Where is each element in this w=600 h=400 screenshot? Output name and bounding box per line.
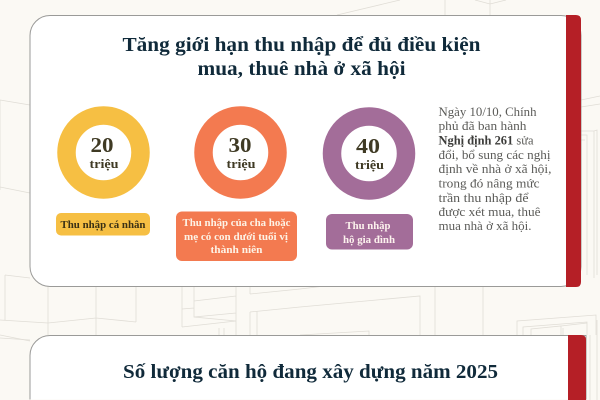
- label: household income: Thu nhập: [346, 220, 390, 232]
- donut: 30 million: triệu: [226, 156, 256, 171]
- donut: 30 million: [204, 116, 278, 190]
- donut: 20 million: triệu: [90, 156, 118, 171]
- text block: decree description: [438, 104, 552, 233]
- text block: decree description: định về nhà ở xã hội,: [438, 161, 552, 176]
- heading: income limits: mua, thuê nhà ở xã hội: [198, 58, 406, 80]
- label: parent income: Thu nhập của cha hoặc: [182, 217, 291, 229]
- text block: decree description: Ngày 10/10, Chính: [438, 104, 537, 119]
- donut: 40 million: triệu: [355, 157, 384, 172]
- text block: decree description: được xét mua, thuê: [438, 204, 541, 219]
- donut: 30 million: 30: [228, 133, 252, 157]
- panel: apartments under construction card: [30, 335, 586, 400]
- heading: apartments under construction: Số lượng căn hộ đang xây dựng năm 2025: [123, 361, 498, 383]
- donut: 20 million: 20: [90, 133, 114, 157]
- donut: 40 million: 40: [356, 134, 380, 158]
- label: household income: hộ gia đình: [343, 234, 395, 246]
- text block: decree description: mua nhà ở xã hội.: [438, 218, 532, 233]
- heading: income limits: [122, 34, 481, 80]
- donut: 20 million: [66, 116, 140, 190]
- donut: 40 million: [332, 116, 406, 190]
- label: parent income: [176, 212, 297, 261]
- text block: decree description: Nghị định 261 sửa: [438, 132, 534, 148]
- label: personal income: Thu nhập cá nhân: [60, 219, 146, 231]
- panel: income limits card: [30, 15, 581, 287]
- label: parent income: mẹ có con dưới tuổi vị: [184, 231, 288, 243]
- label: parent income: thành niên: [210, 244, 262, 256]
- text block: decree description: trong đó nâng mức: [438, 176, 540, 190]
- label: household income: [326, 214, 413, 250]
- text block: decree description: phủ đã ban hành: [438, 118, 527, 133]
- label: personal income: [56, 213, 150, 236]
- text block: decree description: trần thu nhập để: [438, 190, 529, 205]
- red side bar: [566, 15, 581, 287]
- heading: income limits: Tăng giới hạn thu nhập để đủ điều kiện: [122, 34, 481, 56]
- text block: decree description: đổi, bổ sung các nghị: [438, 147, 551, 162]
- red side bar: [568, 335, 586, 400]
